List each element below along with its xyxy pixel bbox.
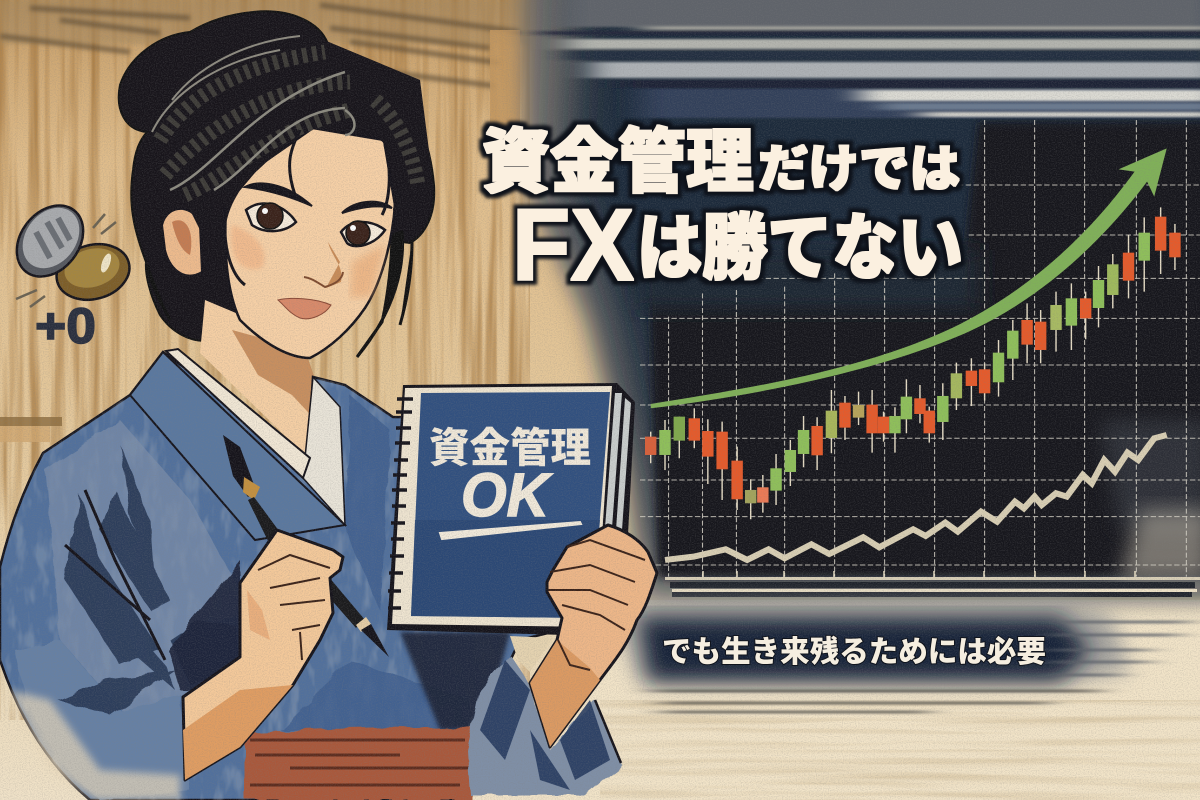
motion dashes (16, 214, 116, 307)
title line two Japanese: は勝てない (637, 189, 963, 294)
nose (304, 272, 343, 287)
front hair sweep (152, 30, 434, 285)
kimono highlight brushwork (45, 420, 250, 720)
lower right cream paper (560, 600, 1200, 800)
back hair and bun (119, 11, 434, 357)
title line two: FX (512, 188, 634, 302)
chart: bottom axis bars and ticks (665, 571, 1200, 597)
lips (278, 298, 331, 319)
writing brush pen (223, 435, 389, 657)
ear (162, 209, 202, 276)
notebook spiral rings (388, 399, 413, 608)
woman figure (0, 11, 622, 800)
coins icon (3, 192, 136, 308)
cream gap under notebook (510, 636, 553, 672)
gold coin (50, 236, 136, 308)
subtitle: でも生き来残るためには必要 (662, 627, 1046, 671)
silver coin (3, 192, 97, 290)
chart: green rising arrow (651, 148, 1167, 408)
wooden ceiling beam (0, 0, 530, 86)
main title (482, 106, 963, 302)
kimono body (0, 350, 547, 800)
lower wall rail (0, 417, 62, 442)
blue collar band (130, 352, 345, 540)
chart: cream zigzag line (665, 435, 1167, 560)
dark shadow below notebook (400, 632, 510, 730)
notebook OK label: OK (461, 461, 553, 529)
kimono mottled brush noise (0, 366, 457, 800)
title line one: だけでは (758, 129, 960, 201)
white inner collar and undergarment (166, 349, 345, 525)
plus zero label: +0 (35, 298, 96, 354)
eyes (246, 203, 385, 246)
chart: candlesticks (645, 207, 1181, 519)
notebook underline (440, 522, 581, 539)
face (225, 128, 395, 358)
notebook cover (392, 386, 612, 627)
chart: dashed grid (640, 120, 1200, 577)
notebook page stack (387, 383, 635, 636)
top speed streaks (540, 26, 1200, 117)
dark chart plate (650, 122, 1200, 577)
sleeve fade brush marks (10, 690, 180, 800)
title line one: 資金管理 (482, 106, 754, 207)
subtitle backing brush stroke (610, 602, 1190, 712)
notebook (387, 383, 635, 636)
red sash (245, 728, 472, 800)
dark brushed chart backdrop (522, 0, 1200, 600)
notebook blue face (411, 392, 610, 618)
neck (200, 300, 320, 458)
hand holding notebook (530, 525, 657, 747)
right sleeve (467, 655, 622, 795)
eyebrows (245, 183, 392, 213)
hand holding pen (183, 530, 343, 780)
wooden pillar (490, 30, 520, 190)
kimono dark folds (58, 445, 240, 715)
notebook title: 資金管理 (429, 414, 591, 474)
